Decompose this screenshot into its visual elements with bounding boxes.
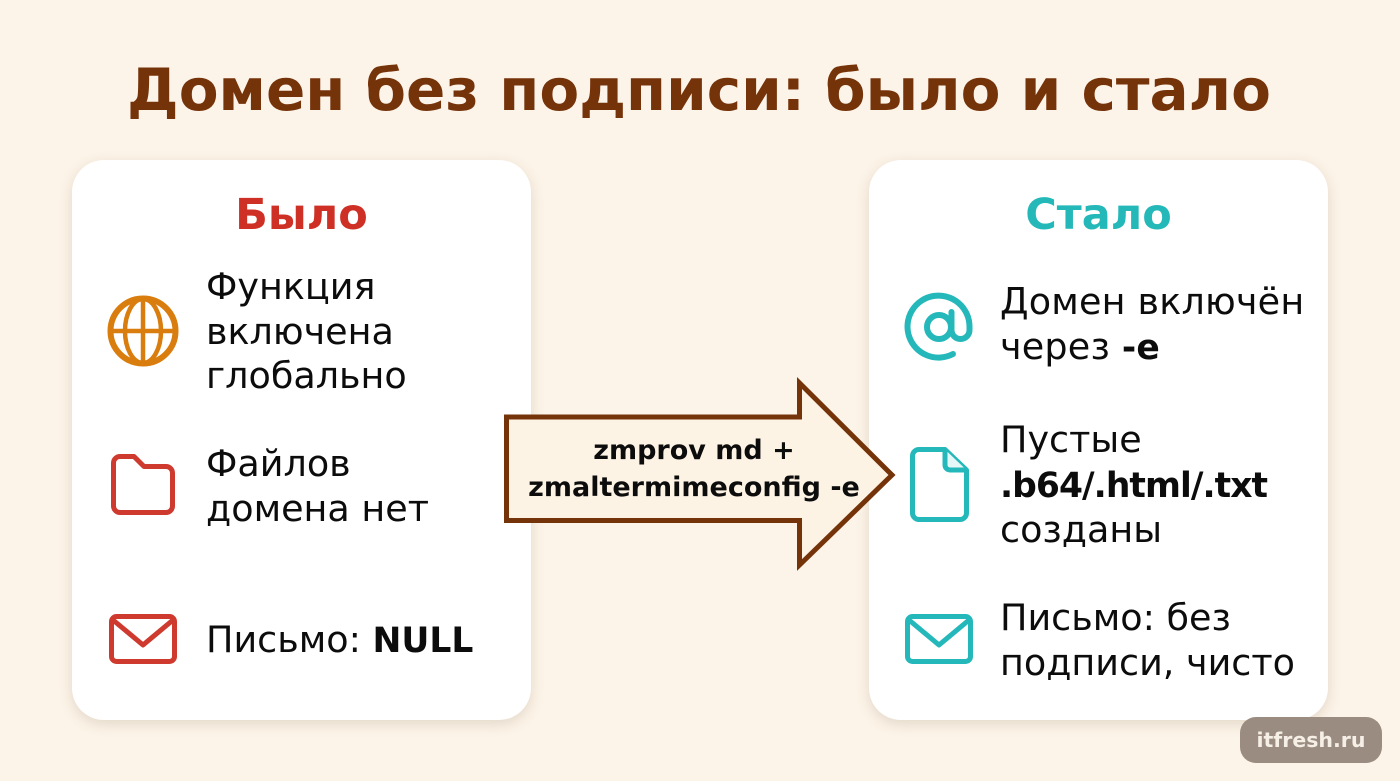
icon: mail red (109, 614, 177, 664)
text: function enabled: глобально (206, 354, 407, 397)
text: domain enabled: Домен включён (1000, 280, 1304, 323)
text: empty files: .b64/.html/.txt (1000, 466, 1267, 506)
text: function enabled (206, 265, 407, 397)
text: function enabled: Функция (206, 265, 375, 308)
text: empty files: созданы (1000, 508, 1162, 551)
panel: after (869, 160, 1328, 720)
text: function enabled: включена (206, 310, 394, 352)
arrow label (528, 435, 860, 503)
text: empty files (1000, 418, 1268, 551)
icon: globe (108, 296, 178, 366)
icon: at sign (904, 292, 972, 361)
text: mail clean: подписи, чисто (1000, 640, 1295, 684)
title: Домен без подписи: было и стало (127, 56, 1271, 124)
heading: after: Стало (1025, 190, 1172, 240)
text: no domain files: Файлов (206, 442, 351, 485)
text: domain enabled (1000, 280, 1304, 368)
panel: before (72, 160, 531, 720)
text: mail clean: Письмо: без (1000, 596, 1231, 639)
icon: folder (111, 454, 175, 515)
watermark: itfresh.ru (1256, 728, 1366, 752)
watermark (1240, 717, 1382, 763)
arrow label: zmprov md + (593, 435, 795, 466)
text: mail clean (1000, 596, 1295, 684)
icon: file (910, 447, 969, 522)
text: domain enabled: через -e (1000, 324, 1160, 368)
icon: mail teal (905, 614, 973, 664)
text: mail null: Письмо: NULL (206, 618, 473, 661)
heading: before: Было (235, 190, 368, 240)
text: no domain files (206, 442, 429, 530)
text: no domain files: домена нет (206, 486, 429, 530)
text: empty files: Пустые (1000, 418, 1142, 461)
arrow label: zmaltermimeconfig -e (528, 472, 860, 503)
